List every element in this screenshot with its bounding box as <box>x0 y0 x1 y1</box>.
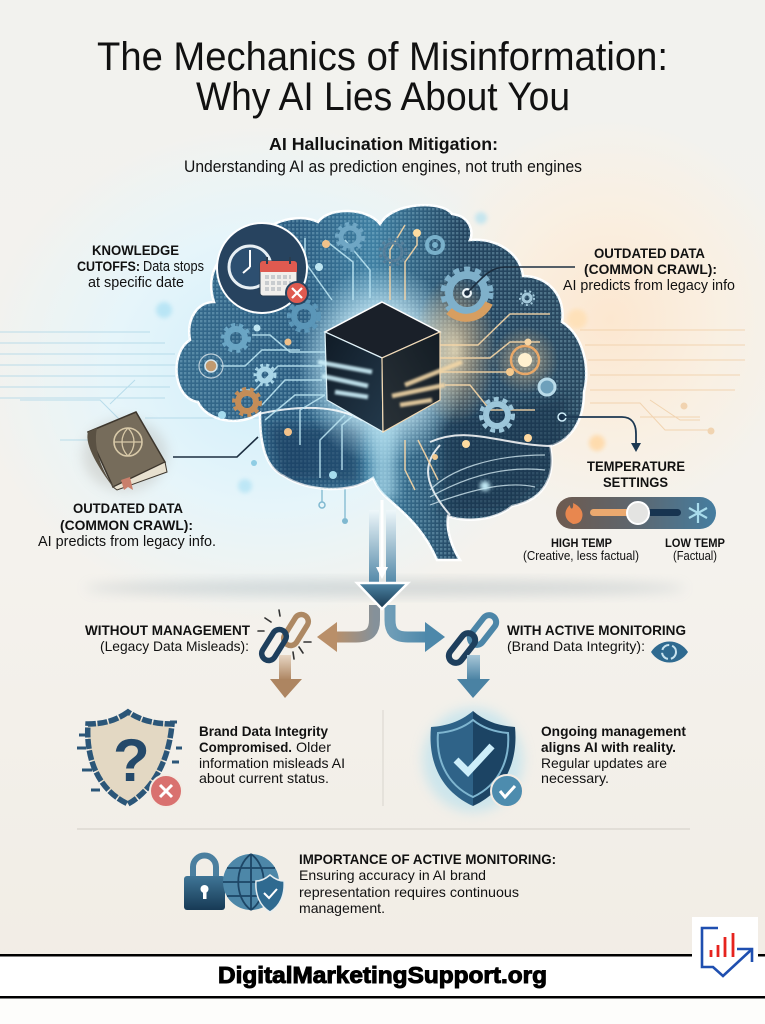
text: importance of active monitoring <box>299 851 556 916</box>
label: outdated data left <box>38 500 216 550</box>
logo <box>692 917 758 983</box>
icon: lock, globe and shield <box>184 854 284 912</box>
label: outdated data left: OUTDATED DATA <box>73 500 183 516</box>
glow dots around brain <box>156 212 605 524</box>
text: brand data integrity compromised: Compromised. <box>199 739 292 755</box>
high temp label: HIGH TEMP <box>551 536 612 550</box>
subtitle <box>184 134 582 176</box>
label: with active monitoring: WITH ACTIVE MONITORING <box>507 622 686 638</box>
label: knowledge cutoffs: at specific date <box>88 275 184 291</box>
icon: old book <box>83 412 167 491</box>
text: ongoing management: necessary. <box>541 770 609 786</box>
text: ongoing management: aligns AI with reality. <box>541 739 676 755</box>
title <box>97 35 668 119</box>
label: without management: (Legacy Data Misleads): <box>100 638 249 654</box>
decorative circuit lines right <box>580 330 745 434</box>
label: with active monitoring <box>507 622 686 654</box>
low temp label: LOW TEMP <box>665 536 725 550</box>
label: without management <box>85 622 250 654</box>
subtitle: Understanding AI as prediction engines, not truth engines <box>184 158 582 176</box>
arrow: down brown <box>270 655 302 698</box>
callout arrow: temperature <box>558 413 641 452</box>
icon: compromised shield <box>77 712 182 807</box>
divider <box>382 710 384 806</box>
brain <box>170 200 590 565</box>
circuit traces right <box>390 225 550 490</box>
text: brand data integrity compromised <box>199 723 345 786</box>
low temp label: (Factual) <box>673 549 717 563</box>
text: importance of active monitoring: IMPORTANCE OF ACTIVE MONITORING: <box>299 851 556 867</box>
footer band: DigitalMarketingSupport.org <box>218 962 547 988</box>
gears <box>199 224 555 431</box>
icon: compromised shield: ? <box>113 727 150 794</box>
label: knowledge cutoffs: CUTOFFS: <box>77 258 140 274</box>
text: brand data integrity compromised: about current status. <box>199 770 329 786</box>
title: Why AI Lies About You <box>196 75 570 119</box>
slider <box>556 497 716 529</box>
label: with active monitoring: (Brand Data Integrity): <box>507 638 645 654</box>
label: outdated data right <box>563 245 735 294</box>
label: without management: WITHOUT MANAGEMENT <box>85 622 250 638</box>
high temp label <box>523 536 639 563</box>
text: brand data integrity compromised: Brand Data Integrity <box>199 723 328 739</box>
text: ongoing management: Regular updates are <box>541 755 667 771</box>
label: knowledge cutoffs <box>77 242 204 291</box>
label: knowledge cutoffs: KNOWLEDGE <box>92 242 179 258</box>
icon: verified shield <box>423 708 523 812</box>
label: outdated data right: AI predicts from legacy info <box>563 278 735 294</box>
node lights <box>218 229 539 491</box>
circuit traces left <box>221 238 370 478</box>
heading: temperature: TEMPERATURE <box>587 458 685 474</box>
divider <box>77 828 690 830</box>
text: ongoing management: Ongoing management <box>541 723 686 739</box>
label: outdated data left: (COMMON CRAWL): <box>60 517 193 533</box>
heading: temperature <box>587 458 685 490</box>
text: ongoing management <box>541 723 686 786</box>
callout line: outdated data right <box>465 267 575 295</box>
title: The Mechanics of Misinformation: <box>97 35 668 79</box>
text: importance of active monitoring: representation requires continuous <box>299 884 519 900</box>
icon: intact chain <box>446 612 499 666</box>
text: brand data integrity compromised: information misleads AI <box>199 755 345 771</box>
high temp label: (Creative, less factual) <box>523 549 639 563</box>
arrow: down blue <box>457 655 490 698</box>
label: outdated data right: (COMMON CRAWL): <box>584 261 717 277</box>
low temp label <box>665 536 725 563</box>
text: importance of active monitoring: management. <box>299 900 385 916</box>
icon: broken chain <box>258 610 311 663</box>
decorative circuit lines left <box>0 332 260 440</box>
central split arrow <box>317 500 445 652</box>
icon: clock and calendar <box>217 223 308 313</box>
black box cube <box>318 302 462 432</box>
subtitle: AI Hallucination Mitigation: <box>269 134 498 154</box>
temperature settings <box>523 458 725 563</box>
footer band <box>0 954 765 1024</box>
icon: monitoring eye <box>651 642 688 662</box>
text: brand data integrity compromised: Older <box>296 739 331 755</box>
label: outdated data left: AI predicts from legacy info. <box>38 534 216 550</box>
label: knowledge cutoffs: Data stops <box>143 259 204 275</box>
label: outdated data right: OUTDATED DATA <box>594 245 705 261</box>
heading: temperature: SETTINGS <box>603 474 668 490</box>
callout line: book <box>173 437 258 457</box>
text: importance of active monitoring: Ensuring accuracy in AI brand <box>299 867 486 883</box>
